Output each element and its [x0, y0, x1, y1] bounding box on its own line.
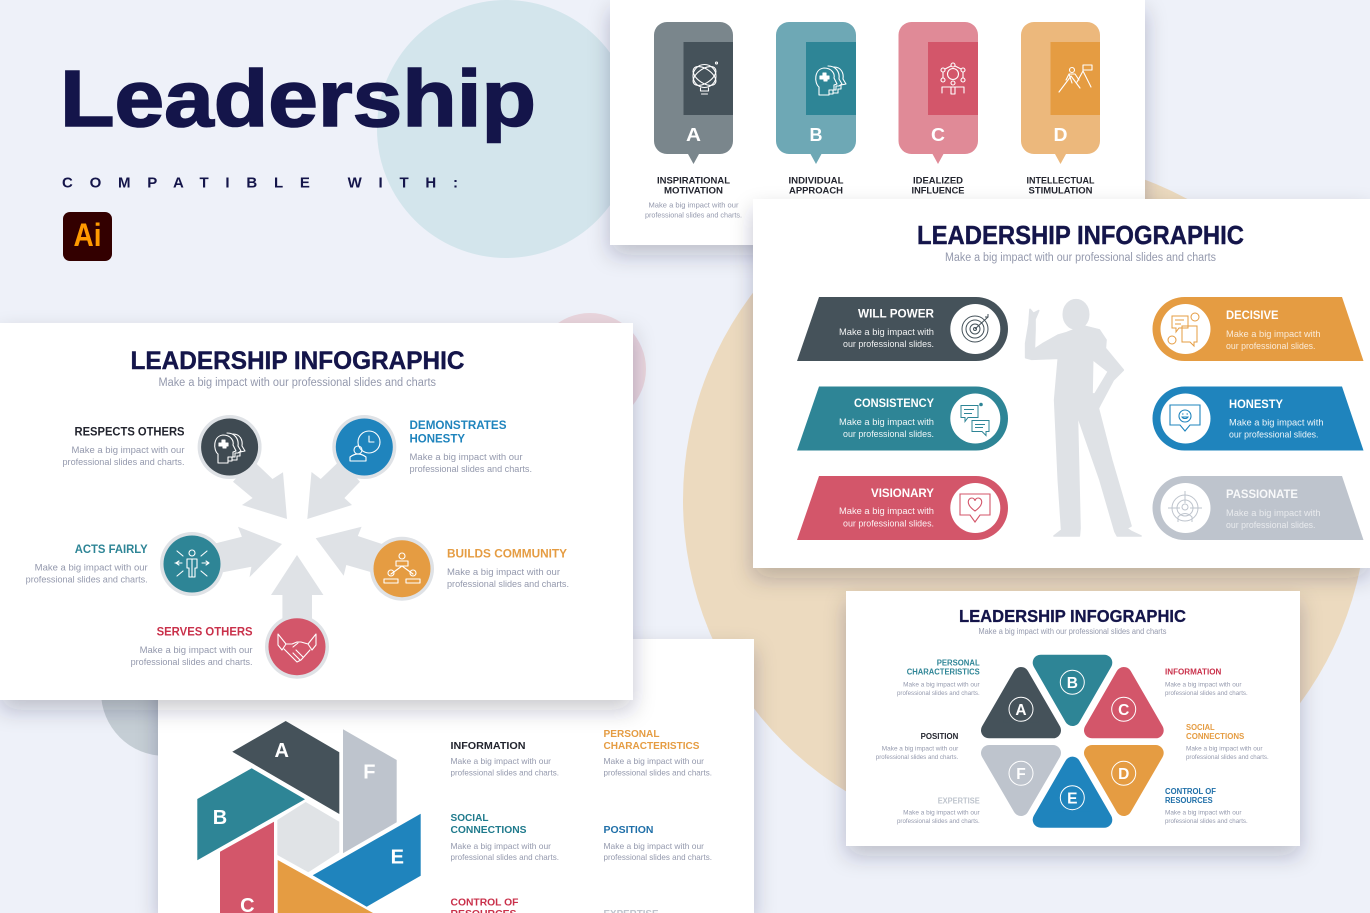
card labels: STIMULATION: [1028, 186, 1093, 196]
background circle: pink: [534, 313, 646, 425]
triangle labels: SOCIAL: [1186, 723, 1215, 732]
column text: Make a big impact with our: [450, 841, 551, 851]
card labels: MOTIVATION: [664, 186, 723, 196]
bar: honesty: our professional slides.: [1229, 430, 1318, 440]
triangle labels: professional slides and charts.: [876, 754, 959, 761]
node: demonstrates honesty: [332, 415, 396, 479]
hexagon diagram: E: [391, 846, 404, 868]
triangle labels: [876, 658, 1269, 825]
node: respects others: [198, 415, 262, 479]
label: respects others: Make a big impact with our: [72, 445, 185, 455]
bar: consistency: CONSISTENCY: [854, 396, 934, 410]
sub heading: Make a big impact with our professional slides and charts: [158, 377, 436, 389]
hexagon diagram: A: [274, 740, 289, 762]
heading: LEADERSHIP INFOGRAPHIC: [130, 347, 464, 375]
label: respects others: professional slides and charts.: [62, 457, 184, 467]
card labels: [645, 176, 1095, 220]
bar: passionate: our professional slides.: [1226, 520, 1316, 531]
bar: consistency: Make a big impact with: [839, 417, 934, 428]
column text: SOCIAL: [450, 812, 489, 824]
bar: decisive: Make a big impact with: [1226, 329, 1320, 340]
label: respects others: [62, 426, 185, 467]
bar: honesty: HONESTY: [1229, 397, 1283, 411]
node: acts fairly: [160, 532, 224, 596]
card C: C: [931, 124, 945, 145]
hexagon diagram: [197, 721, 421, 913]
triangle D: [1092, 753, 1156, 808]
background circle: teal: [377, 0, 635, 258]
card labels: Make a big impact with our: [648, 200, 739, 210]
triangle labels: CONTROL OF: [1165, 787, 1216, 796]
bar: will power: [797, 297, 1008, 361]
background circle: grey: [101, 628, 229, 756]
triangle C: C: [1118, 702, 1129, 719]
title: Leadership: [60, 54, 536, 143]
column text: CHARACTERISTICS: [604, 740, 700, 752]
bar: passionate: PASSIONATE: [1226, 487, 1298, 501]
bar: passionate: [1152, 476, 1364, 540]
card B: [776, 22, 856, 164]
triangle labels: POSITION: [921, 732, 959, 741]
card D: D: [1054, 124, 1068, 145]
label: acts fairly: [26, 544, 148, 584]
triangle labels: professional slides and charts.: [1186, 754, 1269, 761]
triangle labels: professional slides and charts.: [1165, 690, 1248, 697]
triangle labels: Make a big impact with our: [903, 810, 980, 816]
bar: consistency: [797, 386, 1008, 450]
card C: [898, 22, 978, 164]
panel: hexagon text bottom left: [158, 639, 754, 913]
label: acts fairly: ACTS FAIRLY: [75, 544, 148, 556]
triangle labels: CHARACTERISTICS: [907, 668, 980, 676]
hexagon diagram: B: [213, 807, 227, 829]
column text: CONTROL OF: [450, 896, 519, 908]
label: builds community: professional slides and charts.: [447, 579, 569, 589]
card B: B: [810, 124, 822, 145]
triangle labels: Make a big impact with our: [1165, 810, 1242, 816]
label: demonstrates honesty: [410, 420, 532, 474]
panel: traits with silhouette: [753, 199, 1370, 568]
column text: professional slides and charts.: [450, 768, 559, 778]
triangle labels: EXPERTISE: [938, 796, 980, 806]
column text: [450, 728, 712, 913]
background circle: beige: [683, 158, 1367, 842]
label: respects others: RESPECTS OTHERS: [74, 426, 185, 438]
label: builds community: Make a big impact with our: [447, 567, 560, 577]
triangle F: [989, 753, 1053, 808]
triangle labels: professional slides and charts.: [897, 818, 980, 825]
hexagon diagram: F: [363, 762, 375, 784]
column text: Make a big impact with our: [604, 841, 704, 851]
card labels: INFLUENCE: [912, 186, 964, 196]
label: demonstrates honesty: HONESTY: [410, 434, 465, 446]
column text: Make a big impact with our: [450, 756, 551, 766]
card A: A: [686, 124, 701, 145]
column text: INFORMATION: [450, 740, 526, 752]
card labels: INSPIRATIONAL: [657, 176, 730, 186]
triangle labels: PERSONAL: [937, 658, 980, 668]
sub heading: Make a big impact with our professional slides and charts: [978, 627, 1167, 636]
triangle labels: Make a big impact with our: [903, 682, 980, 688]
bar: decisive: [1152, 297, 1364, 361]
icon: Adobe Illustrator: [63, 212, 112, 261]
label: serves others: Make a big impact with our: [140, 645, 253, 655]
card labels: INDIVIDUAL: [788, 176, 844, 186]
bar: will power: WILL POWER: [858, 306, 934, 320]
node: serves others: [265, 615, 329, 679]
bar: visionary: our professional slides.: [843, 518, 934, 530]
card labels: INTELLECTUAL: [1026, 176, 1095, 186]
panel: top callout cards: [610, 0, 1145, 245]
label: builds community: [447, 548, 569, 589]
column text: Make a big impact with our: [604, 756, 704, 766]
bar: will power: our professional slides.: [843, 339, 934, 350]
node: builds community: [370, 537, 434, 601]
bar: consistency: our professional slides.: [843, 429, 934, 440]
silhouette of leader: [1026, 300, 1141, 536]
column text: professional slides and charts.: [604, 852, 712, 862]
arrows: [213, 460, 382, 625]
triangle A: [989, 675, 1053, 730]
triangle labels: professional slides and charts.: [897, 690, 980, 697]
label: serves others: [131, 626, 253, 667]
card D: [1021, 22, 1100, 164]
triangle A: A: [1015, 702, 1027, 719]
sub heading: Make a big impact with our professional slides and charts: [945, 252, 1216, 264]
label: acts fairly: Make a big impact with our: [35, 562, 148, 572]
column text: professional slides and charts.: [604, 768, 712, 778]
triangle labels: Make a big impact with our: [882, 746, 958, 752]
bar: will power: Make a big impact with: [839, 327, 934, 338]
label: builds community: BUILDS COMMUNITY: [447, 548, 567, 560]
column text: POSITION: [604, 824, 654, 836]
card labels: APPROACH: [789, 186, 843, 196]
triangle B: B: [1067, 675, 1078, 692]
triangle B: [1041, 663, 1104, 718]
triangle labels: INFORMATION: [1165, 668, 1222, 676]
bar: decisive: our professional slides.: [1226, 341, 1316, 352]
label: demonstrates honesty: DEMONSTRATES: [410, 420, 507, 432]
column text: CONNECTIONS: [450, 824, 526, 836]
label: serves others: SERVES OTHERS: [157, 626, 253, 638]
bar: visionary: [797, 476, 1008, 540]
label: demonstrates honesty: Make a big impact with our: [410, 452, 523, 462]
triangle F: F: [1016, 766, 1026, 783]
triangle C: [1092, 675, 1156, 730]
triangle D: D: [1118, 766, 1129, 783]
label: acts fairly: professional slides and charts.: [26, 574, 148, 584]
heading: LEADERSHIP INFOGRAPHIC: [917, 220, 1244, 250]
column text: PERSONAL: [604, 728, 660, 740]
triangle labels: Make a big impact with our: [1186, 746, 1262, 752]
panel: arrows left: [0, 323, 633, 700]
bar: decisive: DECISIVE: [1226, 308, 1278, 322]
card labels: professional slides and charts.: [645, 210, 742, 220]
triangle E: [1041, 765, 1104, 820]
triangle labels: CONNECTIONS: [1186, 732, 1245, 741]
bar: visionary: VISIONARY: [871, 486, 934, 500]
column text: professional slides and charts.: [450, 852, 559, 862]
bar: honesty: Make a big impact with: [1229, 418, 1324, 428]
bar: passionate: Make a big impact with: [1226, 508, 1320, 519]
subtitle: compatible with: COMPATIBLE WITH:: [62, 174, 458, 192]
label: demonstrates honesty: professional slides and charts.: [410, 464, 532, 474]
triangle labels: professional slides and charts.: [1165, 818, 1248, 825]
bar: visionary: Make a big impact with: [839, 506, 934, 517]
bar: honesty: [1152, 386, 1364, 450]
heading: LEADERSHIP INFOGRAPHIC: [959, 606, 1186, 626]
card A: [654, 22, 733, 164]
label: serves others: professional slides and charts.: [131, 657, 253, 667]
icon: Adobe Illustrator: Ai: [74, 217, 102, 253]
panel: triangles bottom right: [846, 591, 1300, 846]
card labels: IDEALIZED: [913, 176, 963, 186]
triangle labels: RESOURCES: [1165, 796, 1213, 805]
triangle labels: Make a big impact with our: [1165, 682, 1242, 688]
triangle E: E: [1067, 790, 1077, 808]
